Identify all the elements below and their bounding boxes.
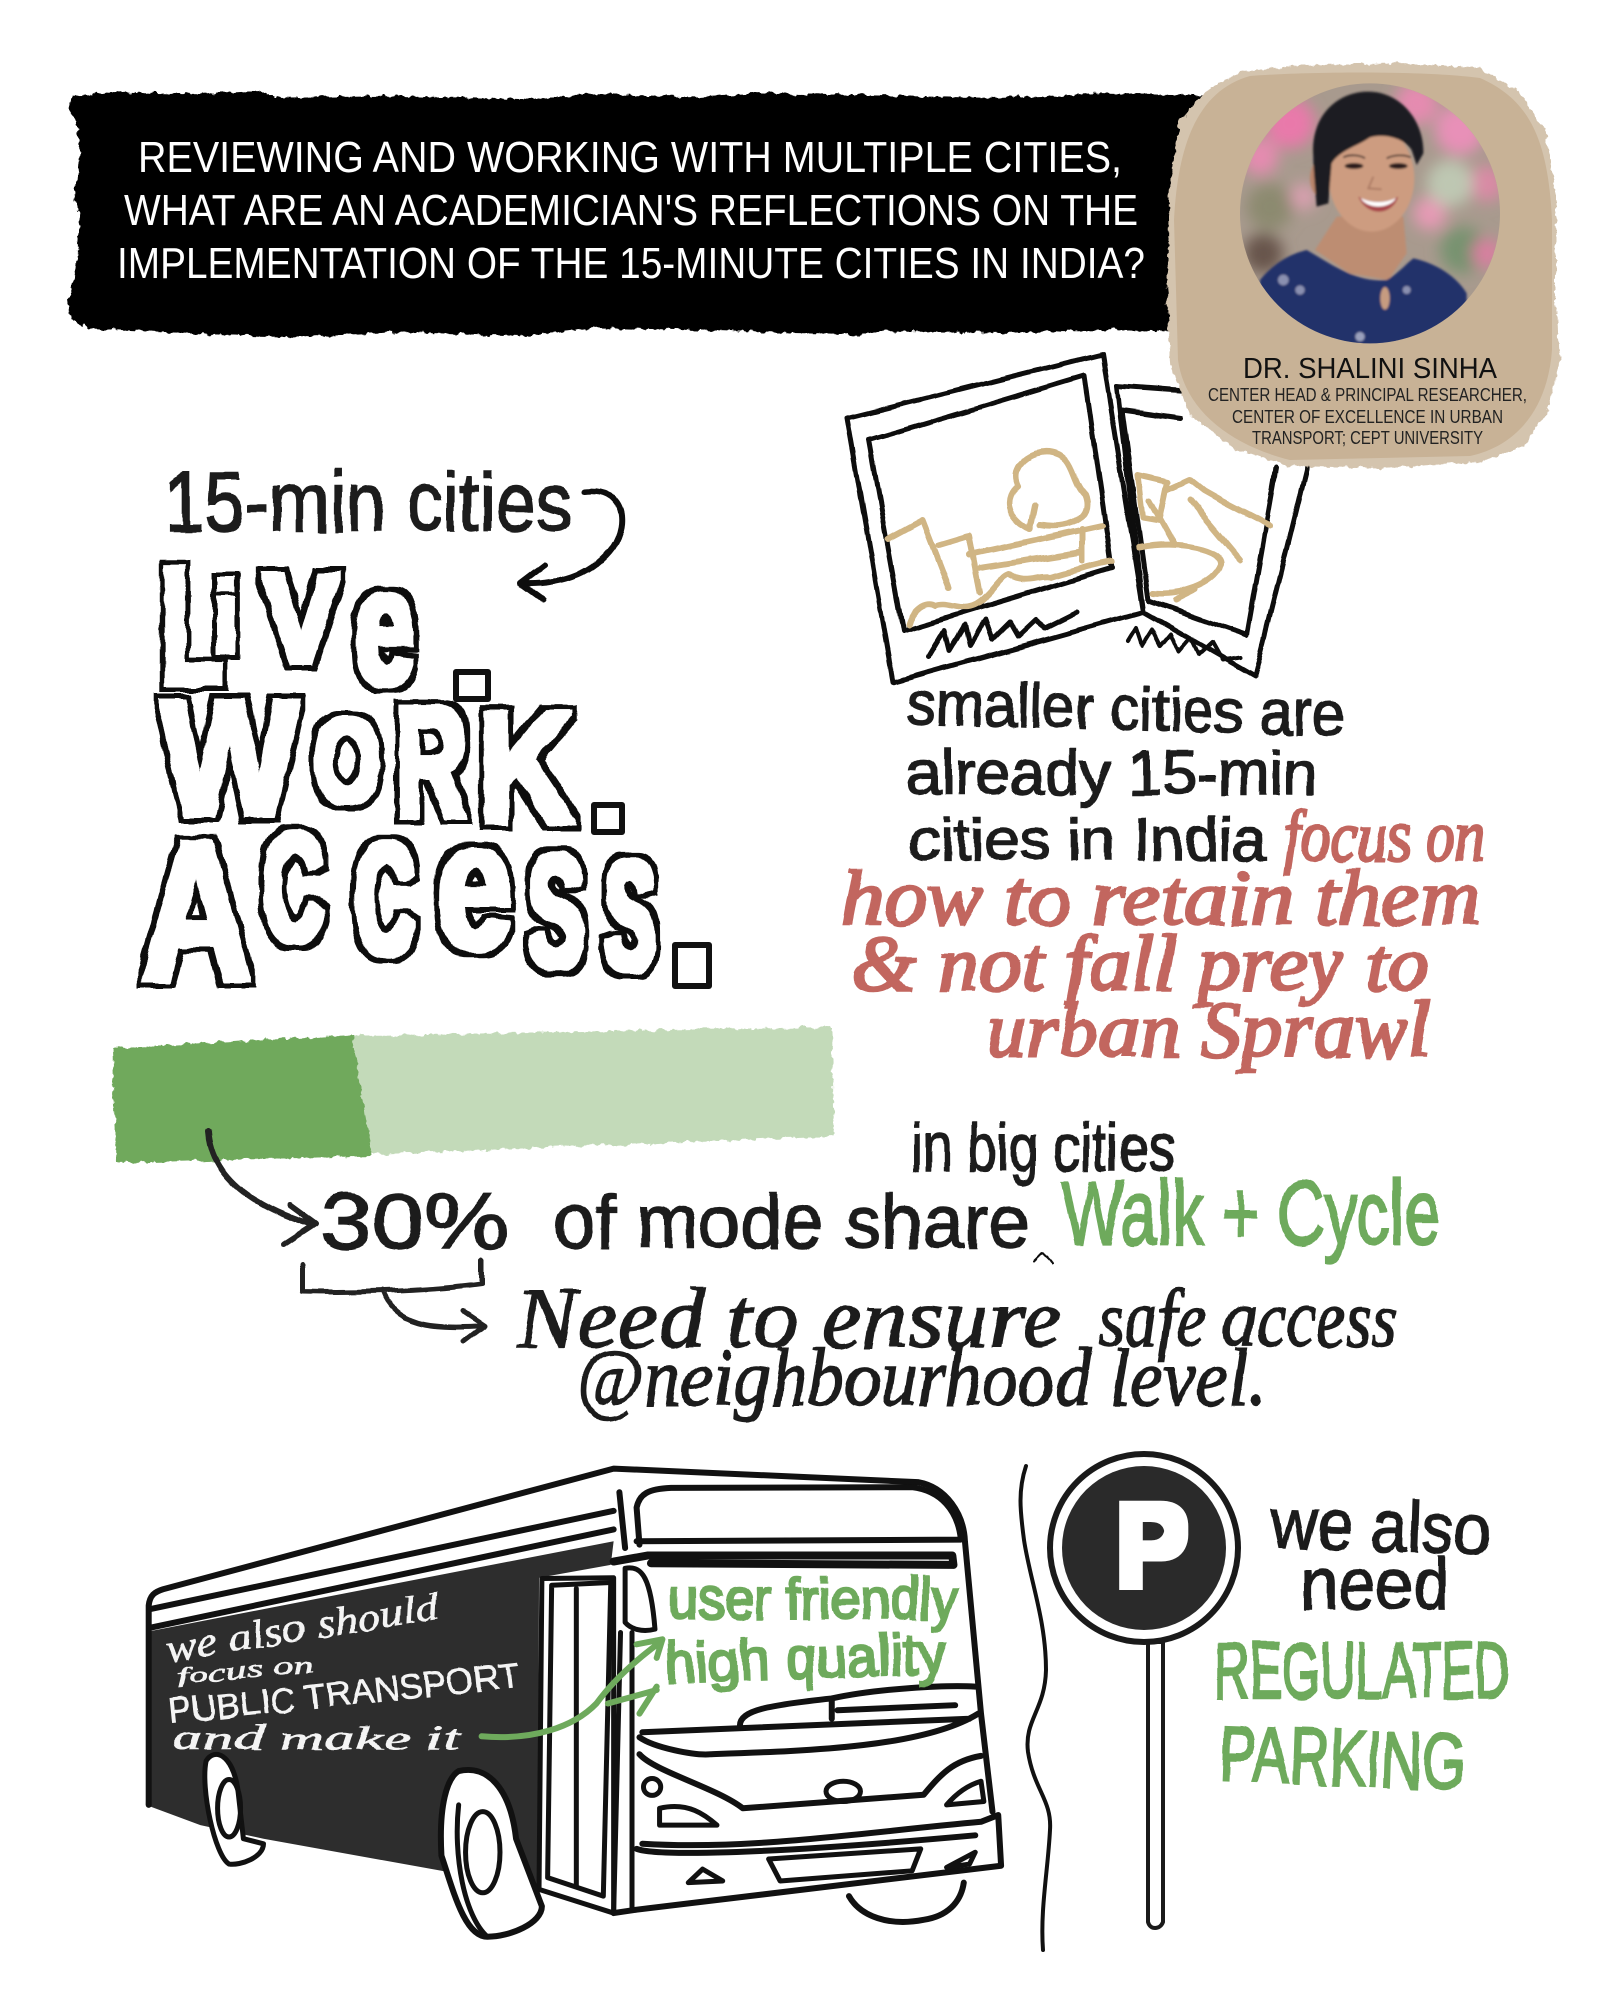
face bbox=[1329, 125, 1414, 232]
bus illustration bbox=[146, 1469, 1001, 1937]
speaker role: CENTER OF EXCELLENCE IN URBAN bbox=[1232, 407, 1503, 427]
15-min cities heading with arrow: 15-min cities bbox=[164, 455, 572, 549]
Access: S bbox=[528, 822, 584, 1001]
speaker role: TRANSPORT; CEPT UNIVERSITY bbox=[1252, 428, 1483, 448]
back polaroid bbox=[1117, 386, 1310, 676]
speaker role bbox=[1208, 385, 1527, 448]
white side text: and make it bbox=[172, 1720, 463, 1757]
mode share text and arrows bbox=[209, 1110, 1440, 1423]
regulated parking text bbox=[1214, 1483, 1510, 1807]
bumper bbox=[614, 1815, 1001, 1913]
15-min cities heading with arrow bbox=[164, 455, 621, 600]
beige speaker card bbox=[1167, 64, 1560, 468]
Live bbox=[161, 531, 488, 720]
wavy divider line bbox=[1020, 1466, 1050, 1950]
front face bbox=[639, 1754, 981, 1808]
bus linework bbox=[146, 1469, 1001, 1937]
Live: i bbox=[214, 562, 238, 674]
question text: WHAT ARE AN ACADEMICIAN'S REFLECTIONS ON THE bbox=[124, 186, 1138, 235]
regulated parking text: we also bbox=[1269, 1483, 1492, 1571]
green arrow from side panel to windscreen bbox=[482, 1639, 662, 1737]
mode share text and arrows: of mode share bbox=[554, 1180, 1030, 1265]
smaller cities text: already 15-min bbox=[906, 739, 1318, 808]
Access: e bbox=[437, 782, 512, 987]
ear bbox=[1309, 164, 1318, 196]
front corner bbox=[614, 1633, 632, 1913]
card background bbox=[1167, 64, 1560, 468]
hair bbox=[1313, 92, 1423, 207]
Access bbox=[141, 782, 709, 1023]
30 percent segment bbox=[113, 1035, 372, 1163]
polaroid photos sketch bbox=[847, 354, 1310, 682]
eyes and brows bbox=[1345, 163, 1363, 169]
red retention message: focus on bbox=[1284, 796, 1485, 876]
neck bbox=[1315, 217, 1407, 280]
smaller cities text: cities in India bbox=[909, 806, 1268, 873]
question text bbox=[117, 133, 1145, 288]
Access: C bbox=[263, 801, 324, 974]
smile bbox=[1358, 197, 1398, 212]
rear wheel bbox=[205, 1754, 264, 1864]
Access: A bbox=[141, 800, 252, 1023]
Work: O bbox=[314, 695, 380, 827]
regulated parking text: need bbox=[1301, 1545, 1449, 1625]
smaller cities text bbox=[906, 669, 1345, 873]
green windscreen text: user friendly bbox=[668, 1567, 958, 1632]
white side text: we also should bbox=[162, 1583, 443, 1671]
mode share text and arrows: @neighbourhood level. bbox=[576, 1332, 1267, 1423]
question text: REVIEWING AND WORKING WITH MULTIPLE CITIES, bbox=[138, 133, 1122, 182]
block letters: Live. Work. Access. bbox=[141, 531, 709, 1023]
green windscreen text: high quality bbox=[664, 1621, 946, 1696]
speaker role: CENTER HEAD & PRINCIPAL RESEARCHER, bbox=[1208, 385, 1527, 405]
Access: C bbox=[355, 809, 415, 988]
Access: S bbox=[605, 829, 655, 1004]
mode share bar bbox=[113, 1027, 834, 1163]
black brush banner bbox=[68, 91, 1210, 337]
white side text: focus on bbox=[175, 1652, 315, 1690]
red retention message bbox=[841, 796, 1485, 1073]
Work bbox=[161, 666, 622, 856]
header banner bbox=[68, 91, 1210, 337]
insertion caret bbox=[1034, 1254, 1052, 1264]
letter P: P bbox=[1116, 1480, 1188, 1612]
smaller cities text: smaller cities are bbox=[906, 669, 1345, 749]
mode share text and arrows: 30% bbox=[320, 1177, 508, 1265]
mode share text and arrows: Need to ensure bbox=[515, 1270, 1062, 1366]
Work: W bbox=[161, 666, 298, 850]
mode share text and arrows: safe access bbox=[1098, 1275, 1398, 1362]
front polaroid bbox=[847, 354, 1143, 682]
arrow from bar to 30 percent bbox=[209, 1131, 316, 1245]
sign ring bbox=[1050, 1454, 1238, 1642]
front wheel bbox=[441, 1770, 542, 1937]
bar remainder bbox=[340, 1027, 834, 1155]
question text: IMPLEMENTATION OF THE 15-MINUTE CITIES IN INDIA? bbox=[117, 239, 1145, 288]
bracket and arrow to need text bbox=[303, 1260, 485, 1342]
arrow to live work access bbox=[520, 492, 621, 600]
Work: K bbox=[478, 678, 574, 856]
red retention message: urban Sprawl bbox=[986, 986, 1431, 1073]
Live: e bbox=[355, 534, 415, 718]
sign post bbox=[1148, 1642, 1163, 1928]
portrait photo bbox=[1237, 80, 1505, 347]
Work: R bbox=[396, 673, 466, 851]
white side text bbox=[162, 1583, 522, 1757]
mirror bbox=[625, 1568, 655, 1630]
mode share text and arrows: Walk + Cycle bbox=[1062, 1164, 1440, 1264]
navy blouse bbox=[1260, 250, 1467, 347]
Live: V bbox=[263, 548, 339, 689]
white side text: PUBLIC TRANSPORT bbox=[166, 1656, 522, 1732]
red retention message: how to retain them bbox=[841, 854, 1481, 941]
dashboard and hood bbox=[639, 1686, 978, 1754]
green windscreen text bbox=[664, 1567, 958, 1696]
red retention message: & not fall prey to bbox=[851, 920, 1430, 1007]
parking sign bbox=[1050, 1454, 1238, 1928]
regulated parking text: PARKING bbox=[1218, 1709, 1466, 1807]
speaker name: DR. SHALINI SINHA bbox=[1243, 353, 1498, 385]
mode share text and arrows: in big cities bbox=[911, 1110, 1175, 1186]
Live: L bbox=[161, 531, 223, 720]
dark bus side panel bbox=[146, 1541, 614, 1889]
sign disc bbox=[1062, 1466, 1226, 1630]
door bbox=[539, 1578, 614, 1913]
